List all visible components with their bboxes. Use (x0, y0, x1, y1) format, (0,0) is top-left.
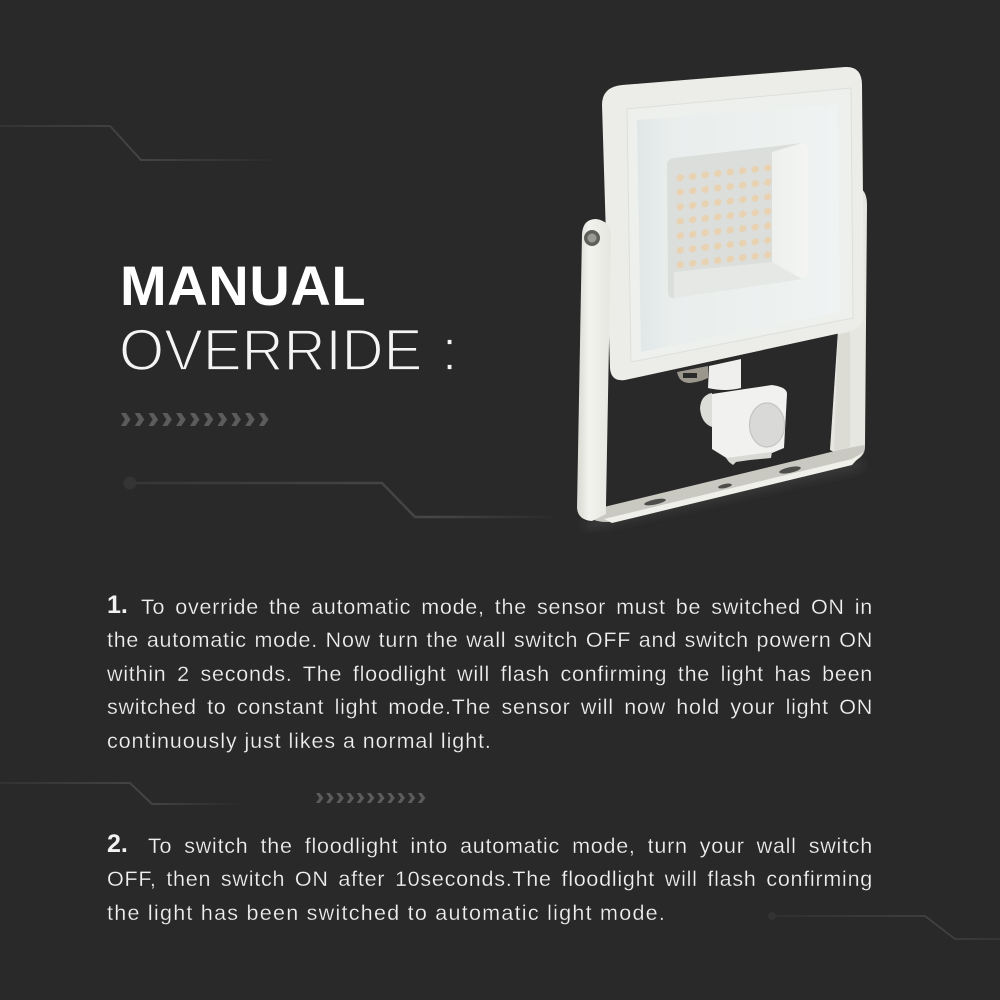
rear frame inner shade (834, 332, 850, 451)
step 1 text: within 2 seconds. The floodlight will flash confirming the light has been (107, 662, 873, 686)
LED array (674, 160, 774, 273)
LED recess (667, 143, 808, 298)
heading: manual override (119, 254, 458, 383)
step 2 text: the light has been switched to automatic light mode. (107, 901, 666, 925)
heading line: override: OVERRIDE : (119, 318, 458, 383)
inner rim (627, 88, 853, 362)
bolt (584, 230, 600, 246)
pivot plate and left bracket arm (577, 219, 611, 521)
right bracket arm (830, 188, 867, 461)
sensor stem (708, 359, 741, 390)
lens (637, 104, 840, 352)
step 1 text (107, 591, 873, 753)
PIR lens (750, 403, 784, 447)
step 2 text (107, 830, 873, 925)
step number 1: 1. (107, 591, 128, 619)
step 2 text: To switch the floodlight into automatic mode, turn your wall switch (148, 834, 873, 858)
sensor side knuckle (700, 393, 712, 427)
step 1 text: To override the automatic mode, the sensor must be switched ON in (141, 595, 873, 619)
step 1 text: continuously just likes a normal light. (107, 729, 492, 753)
step 2 text: OFF, then switch ON after 10seconds.The floodlight will flash confirming (107, 867, 873, 891)
heading line: manual: MANUAL (120, 254, 366, 317)
step number 2: 2. (107, 830, 128, 858)
step 1 text: switched to constant light mode.The sensor will now hold your light ON (107, 695, 873, 719)
mounting holes (644, 465, 801, 507)
glow below bracket (585, 464, 862, 526)
cable gland (677, 366, 708, 383)
step 1 text: the automatic mode. Now turn the wall switch OFF and switch powern ON (107, 628, 873, 652)
floodlight housing (602, 67, 864, 380)
sensor body (712, 385, 787, 459)
bottom bracket bar (590, 445, 865, 522)
